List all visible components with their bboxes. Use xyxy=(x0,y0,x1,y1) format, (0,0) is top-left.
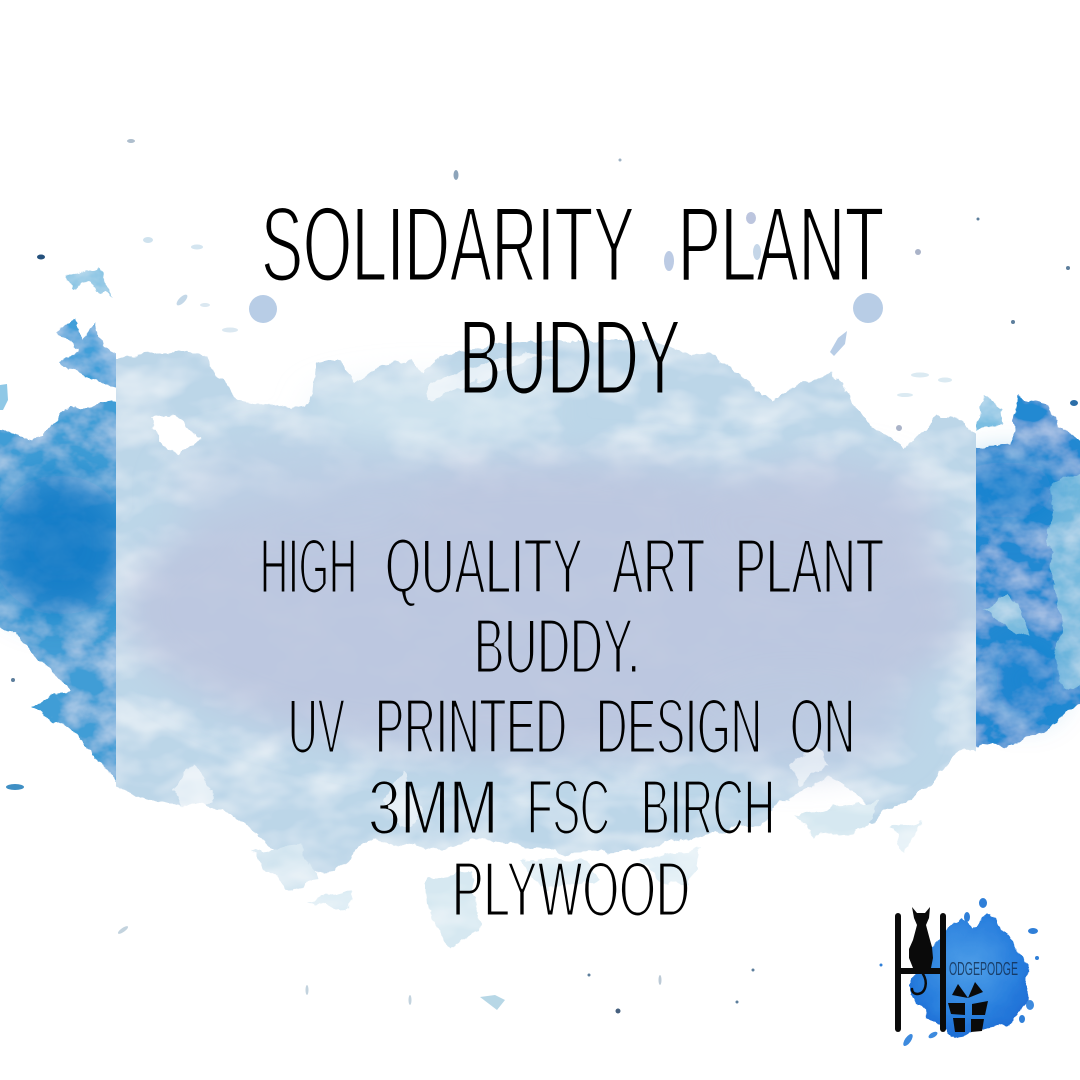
right splash top fragment xyxy=(976,396,1004,430)
blue side splashes xyxy=(0,266,1080,800)
description text: UV xyxy=(288,682,345,770)
title: PLANT xyxy=(678,184,884,304)
icon: cat tail xyxy=(912,974,926,994)
right splash triangle patch xyxy=(982,594,1030,636)
title: BUDDY xyxy=(459,297,681,417)
lavender core of wash xyxy=(125,384,965,770)
small left side flecks xyxy=(0,254,1078,790)
description text: DESIGN xyxy=(596,682,762,770)
left splash small light fragment xyxy=(68,266,112,298)
description text: FSC xyxy=(527,763,610,851)
left splash upper fragment xyxy=(56,318,116,388)
logo blue splat xyxy=(880,898,1039,1047)
description text: HIGH xyxy=(260,522,357,610)
description text: PRINTED xyxy=(375,682,567,770)
icon: cat xyxy=(909,907,933,968)
description text: PLANT xyxy=(735,522,884,610)
description text: ON xyxy=(790,682,855,770)
icon: gift box xyxy=(948,982,988,1032)
darker pools of pigment xyxy=(0,462,1055,714)
white gaps in wash xyxy=(150,352,830,830)
description text: PLYWOOD xyxy=(452,845,690,933)
description text: ART xyxy=(612,522,705,610)
paint droplets xyxy=(143,212,952,397)
description text: BIRCH xyxy=(641,763,775,851)
description text: 3MM xyxy=(368,763,498,851)
logo letter H xyxy=(895,913,946,1032)
description text xyxy=(260,522,884,933)
left splash light body xyxy=(0,400,116,782)
right splash light edge xyxy=(1048,470,1080,692)
title xyxy=(261,184,884,417)
description text: QUALITY xyxy=(385,522,583,610)
pale centre wash xyxy=(100,340,990,948)
right splash body xyxy=(960,398,1080,747)
title: SOLIDARITY xyxy=(261,184,635,304)
wordmark: ODGEPODGE xyxy=(949,959,1018,979)
logo: Hodgepodge xyxy=(880,898,1039,1047)
dark specks xyxy=(11,139,1070,1014)
description text: BUDDY. xyxy=(474,602,640,690)
